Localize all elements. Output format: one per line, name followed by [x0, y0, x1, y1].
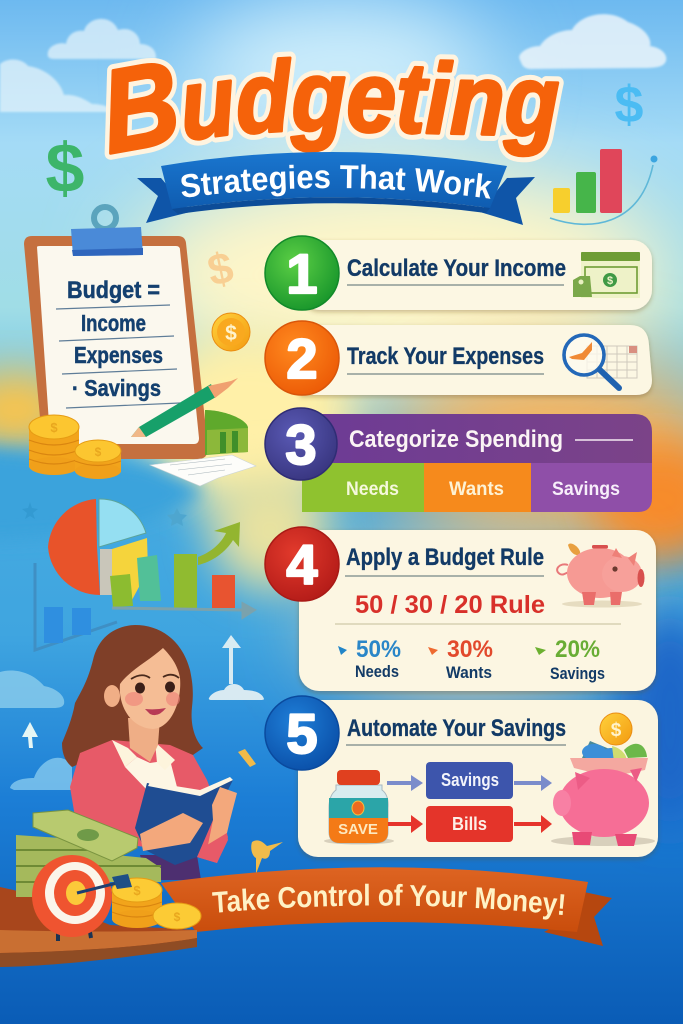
arrow from savings [514, 775, 552, 791]
rule: 50 needs: Needs [355, 662, 399, 681]
bills box [426, 806, 513, 842]
rule: 30 wants [428, 636, 493, 682]
icon: pencil [131, 378, 238, 437]
step 5 badge: 5 [286, 702, 318, 765]
sleeve [197, 833, 228, 863]
eyes [131, 675, 179, 694]
rule: 30 wants: 30% [447, 636, 493, 663]
category: wants: Wants [449, 479, 504, 500]
icon: piggy bank [557, 543, 644, 608]
hair [62, 625, 203, 767]
rule: 20 savings [535, 636, 605, 683]
clipboard formula: Expenses [74, 342, 163, 368]
cloud left [0, 60, 114, 112]
category: needs: Needs [346, 479, 399, 500]
step 1 badge: 1 [286, 242, 318, 305]
icon: star confetti [238, 749, 283, 874]
target [32, 855, 112, 941]
jacket [70, 740, 228, 863]
coin stack small: $ [95, 445, 102, 459]
step 4 card [265, 527, 656, 691]
icon: green dollar sign: $ [46, 129, 84, 207]
step 5 badge [265, 696, 339, 770]
category: needs [302, 463, 424, 512]
icon: banknote: $ [607, 275, 613, 287]
left hand [140, 813, 203, 851]
title: Budgeting [109, 56, 560, 158]
step 5 card [265, 696, 658, 857]
white cloud with arrow [209, 635, 264, 700]
category: wants [424, 463, 531, 512]
title: Budgeting [104, 52, 564, 162]
woman illustration [62, 625, 237, 880]
axis left [35, 563, 117, 650]
arrow in target [77, 874, 132, 893]
rising arrow [198, 522, 240, 565]
closing ribbon text: Take Control of Your Money! [212, 884, 564, 920]
step 2 heading: Track Your Expenses [347, 343, 544, 370]
rule: 20 savings: 20% [555, 636, 600, 663]
icon: magnifier on calendar [564, 335, 637, 388]
step 4 badge: 4 [286, 533, 318, 596]
step 4 heading: Apply a Budget Rule [346, 544, 544, 571]
clipboard formula: Budget = [67, 277, 160, 304]
bars [110, 554, 235, 608]
coin stack large [29, 415, 79, 475]
small up arrow [22, 722, 38, 748]
category: savings [531, 463, 652, 512]
bottom coin stack [112, 878, 201, 929]
icon: save jar: SAVE [338, 821, 378, 838]
bottom coin stack: $ [133, 883, 141, 898]
arrow to bills [388, 815, 423, 833]
icon: piggy bank with coin: $ [611, 720, 622, 741]
axis [112, 604, 254, 617]
pie chart [48, 499, 148, 600]
ear [104, 685, 120, 707]
rule: 50 needs: 50% [356, 636, 401, 663]
rule: 50 needs [338, 636, 401, 681]
clipboard formula: Income [81, 310, 146, 336]
category: savings: Savings [552, 479, 620, 500]
icon: piggy bank with coin [551, 713, 655, 846]
cloud left middle [0, 671, 64, 708]
step 1 heading: Calculate Your Income [347, 255, 566, 282]
blouse [125, 757, 177, 790]
clipboard formula [67, 277, 163, 401]
stars [22, 502, 187, 526]
clipboard formula: · Savings [72, 375, 161, 401]
subtitle ribbon [137, 152, 535, 225]
arrow to savings [387, 775, 423, 791]
mini bar chart icon [550, 149, 658, 224]
step 1 card [265, 236, 652, 310]
rule heading: 50 / 30 / 20 Rule [355, 591, 545, 619]
bills box: Bills [452, 814, 487, 834]
skirt [140, 855, 201, 880]
clipboard [24, 207, 208, 459]
icon: green box [205, 410, 248, 455]
step 1 badge [265, 236, 339, 310]
right hand [208, 787, 237, 845]
closing ribbon [161, 867, 588, 932]
money stacks [16, 810, 161, 897]
savings box: Savings [441, 770, 499, 790]
subtitle text: Strategies That Work [181, 164, 492, 199]
icon: gold coin: $ [225, 322, 237, 345]
cheeks [125, 692, 180, 706]
step 5 heading: Automate Your Savings [347, 715, 566, 742]
chart illustration [22, 499, 254, 650]
icon: faint dollar: $ [203, 243, 238, 296]
book [135, 780, 233, 865]
step 2 badge [265, 321, 339, 395]
shelf [0, 887, 197, 967]
step 2 card [265, 321, 652, 395]
icon: banknote [573, 252, 640, 298]
step 3 card [265, 408, 652, 512]
ribbon tail [544, 892, 612, 946]
step 2 badge: 2 [286, 327, 318, 390]
smile [145, 708, 166, 715]
clipboard clip [71, 207, 143, 256]
icon: blue dollar sign: $ [615, 76, 644, 134]
step 3 badge: 3 [285, 413, 317, 476]
cloud top right [519, 14, 666, 69]
step 3 heading: Categorize Spending [349, 426, 563, 453]
step 4 badge [265, 527, 339, 601]
rule: 20 savings: Savings [550, 664, 605, 683]
cloud top left [48, 19, 156, 59]
bottom coin stack: $ [174, 910, 181, 924]
coin stack large: $ [50, 420, 58, 435]
face [120, 648, 180, 729]
coin stack small [75, 440, 121, 479]
step 3 badge [265, 408, 337, 480]
arrow from bills [514, 815, 552, 833]
savings box [426, 762, 513, 799]
cloud lower left [10, 758, 72, 790]
icon: save jar [324, 770, 394, 844]
icon: gold coin [212, 313, 250, 351]
rule: 30 wants: Wants [446, 663, 492, 682]
icon: papers [150, 455, 256, 486]
collar [112, 740, 175, 770]
neck [128, 718, 160, 762]
